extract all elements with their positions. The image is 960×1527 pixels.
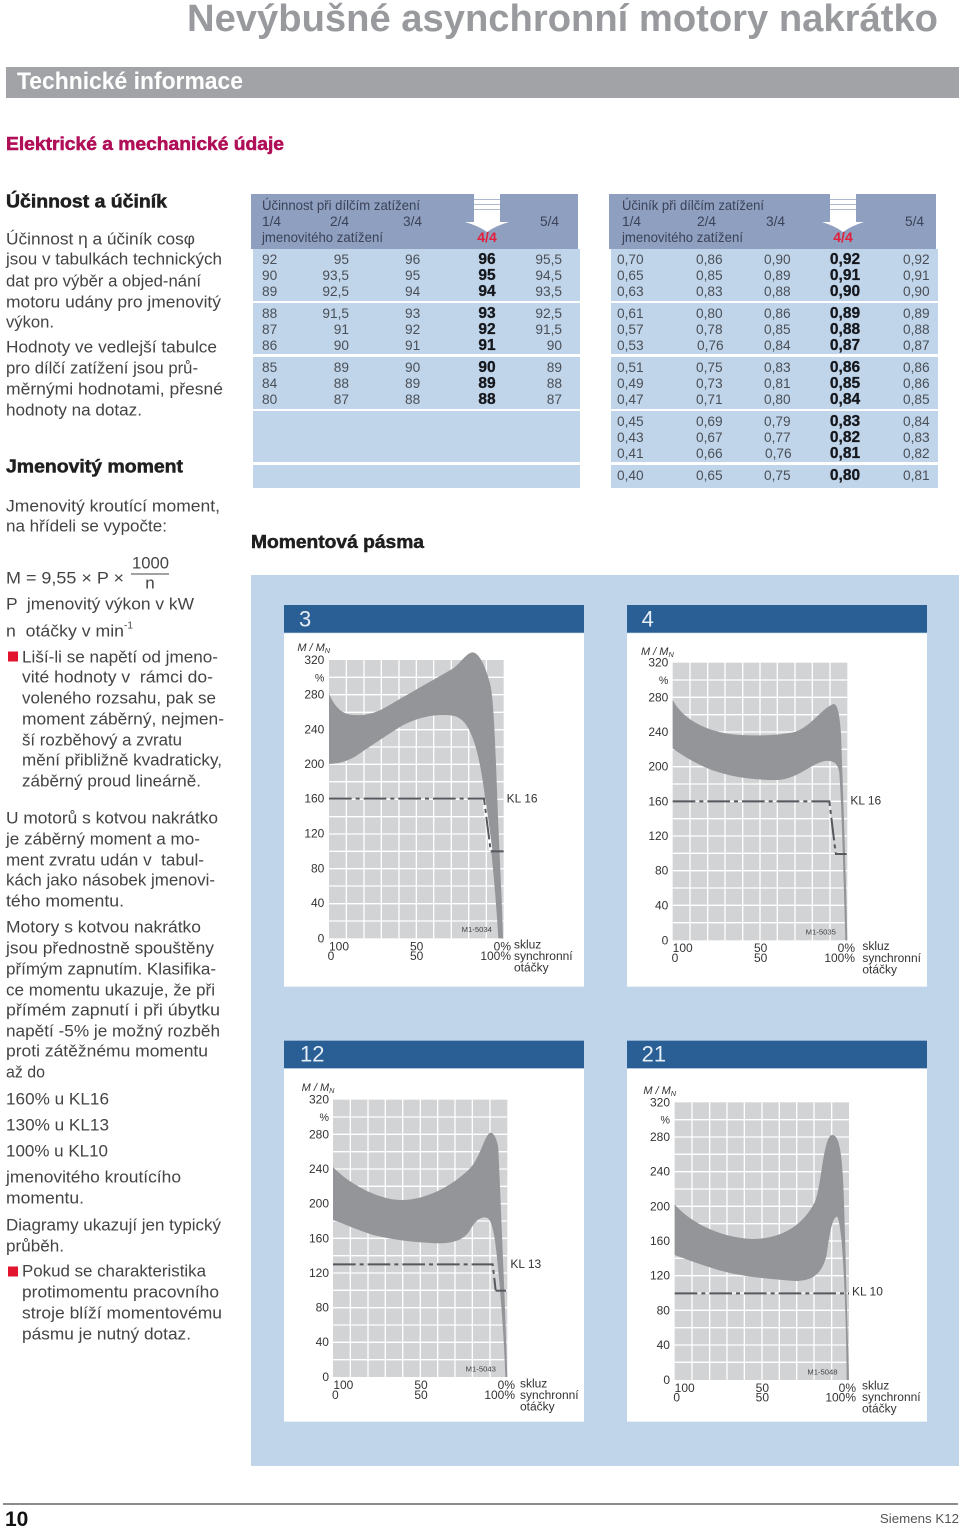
table: účinnost: 92,5 <box>535 306 562 321</box>
left text column <box>5 190 224 1344</box>
text block: účinnost intro: výkon. <box>6 312 54 332</box>
text block: účinnost intro: hodnoty na dotaz. <box>6 400 142 420</box>
table: účinnost: 92 <box>478 321 496 338</box>
table: účiník: 0,40 <box>617 468 644 483</box>
formula <box>6 554 169 592</box>
text block: kotva nakrátko: ment zvratu udán v tabul- <box>6 850 204 870</box>
table: účiník: 0,87 <box>830 337 860 354</box>
chart panel: 12: 200 <box>309 1197 329 1211</box>
table: účinnost: 84 <box>262 376 278 391</box>
chart panel: 3: % <box>315 672 325 684</box>
chart panel: 12: 0 <box>332 1388 339 1402</box>
chart panel: 21: 100% <box>825 1391 856 1405</box>
chart panel: 4: 160 <box>648 794 669 808</box>
chart panel: 12: M / M <box>302 1082 329 1094</box>
table: účiník: 3/4 <box>766 214 785 229</box>
formula: M = 9,55 × P × <box>6 568 124 588</box>
table: účiník: 0,43 <box>617 430 644 445</box>
table: účiník: 0,80 <box>696 306 723 321</box>
table: účiník: 0,65 <box>617 268 644 283</box>
bullet text: protimoment: pásmu je nutný dotaz. <box>22 1324 191 1344</box>
table: účiník: 0,86 <box>903 360 930 375</box>
table: účiník: 0,51 <box>617 360 644 375</box>
list: KL classes: 100% u KL10 <box>6 1142 108 1160</box>
table: účinnost: 90 <box>262 268 278 283</box>
table: účiník: 0,90 <box>903 284 930 299</box>
chart panel: 21: 160 <box>650 1234 670 1248</box>
chart panel: 12: 80 <box>316 1300 329 1314</box>
bullet text: napětí: mění přibližně kvadraticky, <box>22 750 222 770</box>
table: účiník: 0,87 <box>903 338 930 353</box>
text block: kotva nakrátko: je záběrný moment a mo- <box>5 830 200 848</box>
table: účiník: 0,75 <box>696 360 723 375</box>
chart panel: 4: % <box>659 675 669 687</box>
chart panel: 21: M1-5048 <box>807 1367 838 1376</box>
footer: Siemens K12 <box>880 1511 959 1526</box>
formula legend: P jmenovitý výkon v kW <box>6 594 194 614</box>
table: účinnost: 96 <box>478 251 496 268</box>
table: účiník: 0,88 <box>903 322 930 337</box>
table: účinnost: 92,5 <box>322 284 349 299</box>
table: účiník: 0,85 <box>764 322 791 337</box>
chart panel: 21: N <box>671 1089 677 1098</box>
bullet text: napětí: voleného rozsahu, pak se <box>22 688 216 708</box>
text block: přímé zapnutí: až do <box>6 1062 45 1082</box>
table: účinnost: 88 <box>405 392 421 407</box>
chart panel: 3: 100% <box>480 949 511 963</box>
table: účiník: 0,85 <box>696 268 723 283</box>
table: účinnost: 90 <box>405 360 421 375</box>
table: účinnost: 92 <box>405 322 420 337</box>
bullet marker <box>8 1266 18 1276</box>
table: účinnost: 90 <box>547 338 562 353</box>
table: účinnost: 3/4 <box>403 214 422 229</box>
table: účinnost: 91,5 <box>322 306 349 321</box>
text block: účinnost intro: pro dílčí zatížení jsou prů- <box>6 358 198 378</box>
formula: n <box>145 574 155 592</box>
table: účinnost: 88 <box>334 376 349 391</box>
chart panel: 21: 0 <box>663 1373 670 1387</box>
chart panel: 3 <box>284 605 584 987</box>
table: účiník: 0,86 <box>903 376 930 391</box>
chart panel: 4: M / M <box>641 646 668 658</box>
formula legend: n otáčky v min <box>6 622 124 640</box>
table: účinnost: 91 <box>405 338 420 353</box>
formula legend: -1 <box>124 620 133 632</box>
table: účinnost: 89 <box>262 284 277 299</box>
chart panel: 21: 100 <box>675 1381 695 1395</box>
table: účiník: 0,88 <box>830 321 860 338</box>
chart panel: 3: 160 <box>304 792 325 806</box>
chart panel: 12: 12 <box>300 1041 324 1066</box>
table: účinnost: 85 <box>262 360 278 375</box>
table: účiník: 5/4 <box>905 214 924 229</box>
bullet text: napětí: moment záběrný, nejmen- <box>22 710 224 728</box>
bullet text: protimoment <box>22 1262 222 1344</box>
bullet text: napětí: Liší-li se napětí od jmeno- <box>22 648 218 666</box>
chart panel: 12: 100% <box>484 1388 515 1402</box>
table: účiník: Účiník při dílčím zatížení <box>622 198 764 213</box>
section banner: Technické informace: Technické informace <box>17 68 243 95</box>
table: účinnost: jmenovitého zatížení <box>261 230 383 245</box>
table: účinnost: 93 <box>478 305 496 322</box>
chart panel: 3: 0 <box>318 931 325 945</box>
text block: přímé zapnutí <box>5 918 220 1082</box>
chart panel: 4: 40 <box>655 898 669 912</box>
table: účiník: 0,41 <box>617 446 644 461</box>
chart panel: 21: 80 <box>657 1303 670 1317</box>
chart panel: 21: synchronní <box>862 1390 921 1404</box>
chart panel: 12: 0 <box>322 1370 329 1384</box>
table: účiník: 0,85 <box>903 392 930 407</box>
table: účinnost: 87 <box>262 322 277 337</box>
chart panel: 21: 0 <box>673 1391 680 1405</box>
table: účinnost: 92 <box>262 252 277 267</box>
chart panel: 21: 40 <box>657 1338 670 1352</box>
table: účiník: 0,85 <box>830 375 860 392</box>
table: účiník: 0,76 <box>765 446 792 461</box>
table: účiník: 0,80 <box>830 467 860 484</box>
table: účiník: 0,80 <box>764 392 791 407</box>
text block: kotva nakrátko: U motorů s kotvou nakrátko <box>6 808 218 828</box>
chart panel: 4: synchronní <box>862 951 922 965</box>
chart panel: 21: 200 <box>650 1199 670 1213</box>
table: účinnost: 93,5 <box>322 268 349 283</box>
chart panel: 21: 21 <box>642 1041 666 1066</box>
table: účiník: 0,83 <box>830 413 860 430</box>
chart panel: 21: % <box>661 1115 671 1127</box>
table: účinnost: 87 <box>334 392 349 407</box>
chart panel: 12: M1-5043 <box>466 1365 496 1374</box>
table: účiník: 0,71 <box>696 392 723 407</box>
table: účiník: 0,77 <box>764 430 791 445</box>
table: účinnost: 80 <box>262 392 278 407</box>
table: účiník: 0,83 <box>903 430 930 445</box>
table: účinnost: 96 <box>405 252 421 267</box>
table: účiník: 0,65 <box>696 468 723 483</box>
table: účiník: 0,76 <box>697 338 724 353</box>
text block: moment intro <box>6 496 220 536</box>
table: účiník: 0,61 <box>617 306 644 321</box>
chart panel: 4: 120 <box>648 829 669 843</box>
chart panel: 3: 320 <box>304 653 325 667</box>
icon: arrow to 4/4 <box>822 194 864 232</box>
icon: arrow to 4/4 <box>465 194 509 232</box>
chart panel: 3: 120 <box>304 827 325 841</box>
table: účiník: 0,84 <box>764 338 791 353</box>
chart panel: 4 <box>627 605 927 987</box>
table: účinnost: 94 <box>478 283 496 300</box>
chart panel: 21: 50 <box>756 1391 769 1405</box>
table: účinnost: 95 <box>478 267 496 284</box>
chart panel: 3: 80 <box>311 861 325 875</box>
table: účiník: 0,69 <box>696 414 723 429</box>
list: KL classes: 130% u KL13 <box>6 1116 109 1134</box>
table: účiník: 0,89 <box>830 305 860 322</box>
chart panel: 12: otáčky <box>520 1400 555 1414</box>
text block: přímé zapnutí: Motory s kotvou nakrátko <box>6 918 201 936</box>
chart panel: 12: 40 <box>316 1335 329 1349</box>
chart panel: 21: 120 <box>650 1269 670 1283</box>
text block: kotva nakrátko: tého momentu. <box>6 892 124 910</box>
chart panel: 21: 50 <box>756 1381 769 1395</box>
chart panel: 12: synchronní <box>520 1388 579 1402</box>
table: účinnost: 89 <box>547 360 562 375</box>
bullet text: napětí: ší rozběhový a zvratu <box>22 730 182 750</box>
chart panel: 4: 200 <box>648 760 669 774</box>
chart panel: 4: otáčky <box>862 962 897 976</box>
subheading: Elektrické a mechanické údaje: Elektrické a mechanické údaje <box>6 134 284 154</box>
text block: kotva nakrátko: kách jako násobek jmenovi- <box>6 870 215 890</box>
text block: přímé zapnutí: proti zátěžnému momentu <box>6 1042 208 1060</box>
chart panel: 3: 40 <box>311 896 325 910</box>
text block: kotva nakrátko <box>5 808 218 910</box>
chart panel: 21: skluz <box>862 1378 889 1392</box>
formula: 1000 <box>132 554 169 572</box>
table: účiník: 0,84 <box>903 414 930 429</box>
table: účiník: 0,86 <box>764 306 791 321</box>
chart panel: 21: 320 <box>650 1095 670 1109</box>
chart panel: 12: skluz <box>520 1376 547 1390</box>
chart panel: 3: 100 <box>329 939 349 953</box>
table: účiník: 2/4 <box>697 214 716 229</box>
table: účinnost: Účinnost při dílčím zatížení <box>262 198 420 213</box>
chart panel: 3: 0% <box>494 939 511 953</box>
text block: closing notes: průběh. <box>6 1236 64 1256</box>
chart panel: 4: M1-5035 <box>806 928 836 937</box>
bullet text: protimoment: Pokud se charakteristika <box>22 1262 207 1280</box>
footer <box>3 1503 959 1527</box>
chart panel: 4: 50 <box>754 941 768 955</box>
table: účinnost <box>251 194 580 488</box>
chart panel: 21 <box>627 1041 927 1422</box>
chart panel: 4: 280 <box>648 690 669 704</box>
chart panel: 4: 100% <box>824 951 855 965</box>
table: účiník: 0,86 <box>830 359 860 376</box>
table: účinnost: 4/4 <box>477 229 497 245</box>
table: účinnost: 95,5 <box>535 252 562 267</box>
chart panel: 3: N <box>325 646 331 655</box>
section banner: Technické informace <box>6 67 959 98</box>
table: účinnost: 94,5 <box>535 268 562 283</box>
table: účiník: 0,83 <box>696 284 723 299</box>
chart panel: 3: synchronní <box>514 949 573 963</box>
table: účiník: 0,63 <box>617 284 644 299</box>
table: účiník: 0,91 <box>903 268 930 283</box>
chart panel: 21: 0% <box>839 1381 856 1395</box>
chart panel: 3: 3 <box>299 607 311 632</box>
text block: closing notes: momentu. <box>6 1188 84 1208</box>
chart panel: 12: N <box>329 1086 335 1095</box>
bullet text: napětí <box>22 648 224 790</box>
text block: účinnost intro: motoru udány pro jmenovitý <box>6 292 221 312</box>
table: účiník: 1/4 <box>622 214 641 229</box>
table: účinnost: 89 <box>405 376 420 391</box>
chart panel: 3: M / M <box>297 642 325 654</box>
table: účinnost: 89 <box>478 375 496 392</box>
chart panel: 21: M / M <box>643 1085 671 1097</box>
table: účiník: 0,82 <box>903 446 930 461</box>
table: účiník: 0,75 <box>764 468 791 483</box>
chart panel: 12: % <box>320 1112 330 1124</box>
table: účinnost: 95 <box>334 252 349 267</box>
table: účiník: 0,81 <box>830 445 860 462</box>
chart panel: 12: 50 <box>414 1378 428 1392</box>
text block: closing notes <box>5 1168 221 1256</box>
chart panel: 4: 0 <box>662 933 669 947</box>
table: účinnost: 90 <box>478 359 496 376</box>
table: účiník: 0,57 <box>617 322 644 337</box>
bullet text: protimoment: protimomentu pracovního <box>22 1282 219 1302</box>
chart panel: 21: KL 10 <box>852 1284 883 1298</box>
table: účiník: 0,79 <box>764 414 791 429</box>
chart panel: 4: 100 <box>673 941 693 955</box>
text block: přímé zapnutí: ce momentu ukazuje, že při <box>6 980 215 1000</box>
chart panel: 12: 280 <box>309 1127 329 1141</box>
chart panel: 4: 4 <box>642 607 654 632</box>
heading: Momentová pásma: Momentová pásma <box>251 532 425 552</box>
chart panel: 3: 50 <box>410 939 424 953</box>
chart panel: 12: 120 <box>309 1266 329 1280</box>
table: účiník: jmenovitého zatížení <box>621 230 743 245</box>
table: účiník: 0,92 <box>903 252 930 267</box>
table: účiník: 0,67 <box>696 430 723 445</box>
chart panel: 12: 160 <box>309 1231 329 1245</box>
chart panel: 3: 50 <box>410 949 424 963</box>
chart panel: 3: 280 <box>304 688 325 702</box>
bullet text: napětí: vité hodnoty v rámci do- <box>22 668 213 686</box>
table: účiník: 0,81 <box>764 376 791 391</box>
table: účinnost: 88 <box>478 391 496 408</box>
bullet text: protimoment: stroje blíží momentovému <box>22 1304 222 1322</box>
table: účiník: 0,89 <box>764 268 791 283</box>
table: účiník: 0,83 <box>764 360 791 375</box>
chart panel: 4: 50 <box>754 951 768 965</box>
chart panel: 4: 80 <box>655 863 669 877</box>
table: účinnost: 95 <box>405 268 421 283</box>
table: účinnost: 93 <box>405 306 421 321</box>
chart panel: 3: M1-5034 <box>462 925 493 934</box>
text block: účinnost intro: Účinnost η a účiník cosφ <box>6 230 195 248</box>
table: účiník: 0,90 <box>830 283 860 300</box>
text block: přímé zapnutí: přímém zapnutí i při úbytku <box>6 1000 220 1020</box>
chart panel: 4: N <box>668 650 674 659</box>
table: účiník: 0,66 <box>696 446 723 461</box>
chart panel: 12: 50 <box>414 1388 428 1402</box>
table: účinnost: 90 <box>334 338 349 353</box>
table: účinnost: 94 <box>405 284 421 299</box>
text block: closing notes: jmenovitého kroutícího <box>5 1168 181 1186</box>
table: účiník: 0,78 <box>696 322 723 337</box>
table: účiník: 0,49 <box>617 376 644 391</box>
chart panel: 3: 240 <box>304 722 325 736</box>
text block: přímé zapnutí: přímým zapnutím. Klasifika- <box>6 960 216 978</box>
chart panel: 4: KL 16 <box>850 794 882 808</box>
table: účinnost: 93,5 <box>535 284 562 299</box>
table: účiník: 0,47 <box>617 392 644 407</box>
table: účiník: 0,90 <box>764 252 791 267</box>
chart panel: 21: 240 <box>650 1165 670 1179</box>
table: účinnost: 1/4 <box>262 214 281 229</box>
chart panel: 4: 320 <box>648 656 669 670</box>
chart panel: 4: 240 <box>648 725 669 739</box>
table: účinnost: 91 <box>334 322 349 337</box>
table: účiník: 0,73 <box>696 376 723 391</box>
table: účiník: 0,89 <box>903 306 930 321</box>
chart panel: 12: 320 <box>309 1093 329 1107</box>
chart panel: 21: 280 <box>650 1130 670 1144</box>
text block: účinnost intro <box>5 230 223 420</box>
list: KL classes <box>6 1090 109 1160</box>
text block: moment intro: Jmenovitý kroutící moment, <box>6 496 220 516</box>
table: účiník: 0,53 <box>617 338 644 353</box>
table: účiník: 0,84 <box>830 391 860 408</box>
chart panel: 12: 0% <box>498 1378 515 1392</box>
table: účinnost: 87 <box>547 392 562 407</box>
chart panel: 3: 200 <box>304 757 325 771</box>
chart panel: 3: 0 <box>328 949 335 963</box>
chart panel: 12 <box>284 1041 584 1422</box>
text block: účinnost intro: Hodnoty ve vedlejší tabulce <box>6 338 217 356</box>
bullet marker <box>8 652 18 662</box>
table: účinnost: 86 <box>262 338 278 353</box>
table: účiník: 0,45 <box>617 414 644 429</box>
chart panel: 4: skluz <box>862 939 890 953</box>
bullet text: napětí: záběrný proud lineárně. <box>22 772 201 790</box>
table: účinnost: 91 <box>478 337 496 354</box>
list: KL classes: 160% u KL16 <box>6 1090 109 1108</box>
formula legend <box>6 594 194 640</box>
table: účiník: 0,81 <box>903 468 930 483</box>
chart panel: 12: 100 <box>333 1378 354 1392</box>
text block: účinnost intro: jsou v tabulkách technických <box>5 250 222 268</box>
table: účiník: 0,82 <box>830 429 860 446</box>
text block: přímé zapnutí: jsou přednostně spouštěny <box>5 938 215 958</box>
text block: účinnost intro: dat pro výběr a objed-nání <box>6 272 201 290</box>
panel: torque band background <box>251 575 959 1466</box>
table: účinnost: 5/4 <box>540 214 559 229</box>
table: účinnost: 2/4 <box>330 214 349 229</box>
table: účinnost: 88 <box>262 306 278 321</box>
heading: Účinnost a účiník: Účinnost a účiník <box>6 190 168 212</box>
text block: účinnost intro: měrnými hodnotami, přesné <box>6 380 223 398</box>
table: účiník: 0,86 <box>696 252 723 267</box>
table: účinnost: 88 <box>547 376 562 391</box>
text block: moment intro: na hřídeli se vypočte: <box>6 516 167 536</box>
text block: přímé zapnutí: napětí -5% je možný rozběh <box>6 1022 220 1040</box>
table: účiník <box>609 194 938 488</box>
chart panel: 21: otáčky <box>862 1402 897 1416</box>
chart panel: 3: otáčky <box>514 961 549 975</box>
text block: closing notes: Diagramy ukazují jen typický <box>6 1216 221 1234</box>
table: účiník: 0,70 <box>617 252 644 267</box>
table: účiník: 0,91 <box>830 267 860 284</box>
table: účinnost: 91,5 <box>535 322 562 337</box>
chart panel: 12: KL 13 <box>510 1257 542 1271</box>
heading: Jmenovitý moment: Jmenovitý moment <box>6 456 183 476</box>
chart panel: 4: 0 <box>672 951 679 965</box>
chart panel: 3: KL 16 <box>507 791 538 805</box>
chart panel: 4: 0% <box>838 941 855 955</box>
chart panel: 12: 240 <box>309 1162 329 1176</box>
table: účiník: 0,88 <box>764 284 791 299</box>
table: účiník: 4/4 <box>833 229 853 245</box>
chart panel: 3: skluz <box>514 938 541 952</box>
table: účiník: 0,92 <box>830 251 860 268</box>
table: účinnost: 89 <box>334 360 349 375</box>
